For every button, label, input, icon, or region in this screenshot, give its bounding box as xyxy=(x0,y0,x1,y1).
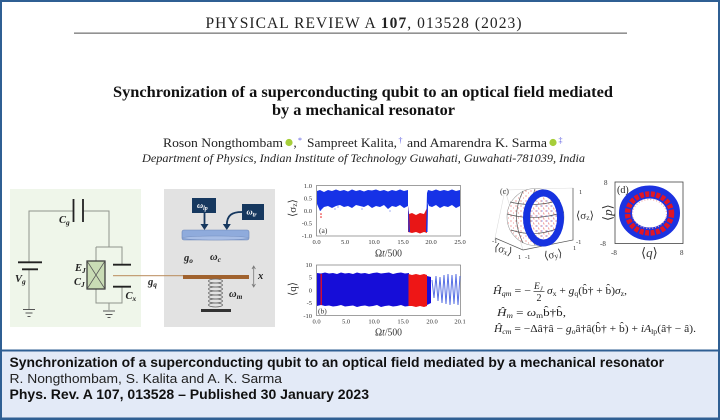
panel: qubit circuit: C xyxy=(59,215,66,226)
equations: Hamiltonians: (b̂† + b̂) xyxy=(578,283,615,297)
coupling line g_q: q xyxy=(153,280,157,289)
panel: qubit circuit: g xyxy=(65,218,70,227)
chart d: phase portrait: 8 xyxy=(604,179,608,187)
chart c: Bloch sphere: -1 xyxy=(525,254,530,261)
panel: qubit circuit: x xyxy=(132,294,137,303)
chart b: q vs time: -10 xyxy=(303,313,312,320)
chart a: sigma z vs time: 15.0 xyxy=(397,239,409,246)
equations: Hamiltonians: 2 xyxy=(536,293,542,304)
chart b: q vs time: -5 xyxy=(307,300,312,307)
equations: Hamiltonians: Ĥ xyxy=(496,307,508,319)
chart b: q vs time: 15.0 xyxy=(397,318,409,326)
chart c: Bloch sphere: ⟨σ xyxy=(576,210,586,222)
affiliation: Department of Physics, Indian Institute of Technology Guwahati, Guwahati-781039, India xyxy=(141,151,585,165)
header: journal citation: PHYSICAL REVIEW A 107, 013528 (2023) xyxy=(206,15,522,32)
authors: ‡ xyxy=(558,136,562,145)
probe laser box: tr xyxy=(253,212,257,218)
equations: Hamiltonians: Ĥ xyxy=(493,323,503,335)
equations: Hamiltonians: cm xyxy=(502,327,512,336)
footer: authors: R. Nongthombam, S. Kalita and A. K. Sarma xyxy=(10,371,283,386)
probe laser box xyxy=(223,204,264,230)
chart a: sigma z vs time: Ωt/500 xyxy=(375,248,402,260)
chart c: Bloch sphere: -1 xyxy=(492,238,497,245)
panel: qubit circuit: J xyxy=(80,280,85,289)
panel: optomechanical resonator xyxy=(164,189,275,327)
panel: qubit circuit: C xyxy=(74,277,81,288)
coupling line g_q: g xyxy=(148,277,153,288)
chart a: sigma z vs time: 5.0 xyxy=(341,239,349,246)
equations: Hamiltonians: b̂†b̂, xyxy=(543,305,566,319)
authors: Sampreet Kalita, xyxy=(307,136,397,150)
chart a: sigma z vs time: -1.0 xyxy=(302,233,312,240)
equations: Hamiltonians: = − xyxy=(512,285,531,297)
panel: qubit circuit: V xyxy=(15,274,22,285)
paper title xyxy=(113,84,613,119)
equations: Hamiltonians: J xyxy=(540,286,544,292)
chart c: Bloch sphere: -1 xyxy=(576,239,581,246)
displacement arrow xyxy=(252,266,255,287)
spring xyxy=(208,279,222,307)
authors xyxy=(163,136,562,150)
authors: † xyxy=(398,136,402,145)
pump laser box xyxy=(192,198,216,230)
chart a: sigma z vs time xyxy=(287,183,466,260)
chart b: q vs time: 5 xyxy=(309,274,312,282)
equations: Hamiltonians: + xyxy=(557,285,569,297)
panel: qubit circuit: g xyxy=(21,277,26,286)
chart d: phase portrait: -8 xyxy=(611,249,617,257)
chart b: q vs time: 10 xyxy=(306,262,312,269)
chart b: q vs time: ⟨q⟩ xyxy=(287,282,299,296)
chart c: Bloch sphere xyxy=(492,187,594,262)
footer: paper title: Synchronization of a superconducting qubit to an optical field mediated by a mechanical resonator xyxy=(10,355,665,370)
equations: Hamiltonians: , xyxy=(624,285,627,297)
chart d: phase portrait: ⟨q⟩ xyxy=(641,245,658,260)
equations: Hamiltonians xyxy=(492,282,696,336)
pump laser box: ω xyxy=(197,200,203,210)
chart d: phase portrait: 8 xyxy=(680,249,684,257)
chart c: Bloch sphere: ⟨σ xyxy=(493,242,506,256)
authors: * xyxy=(298,136,302,145)
panel: qubit circuit xyxy=(10,189,141,327)
equations: Hamiltonians: σ xyxy=(615,285,621,297)
equations: Hamiltonians: lp xyxy=(651,327,657,336)
chart d: phase portrait: -8 xyxy=(600,240,606,248)
chart c: Bloch sphere: ⟩ xyxy=(590,210,594,222)
equations: Hamiltonians: o xyxy=(572,327,576,336)
panel: qubit circuit: E xyxy=(75,263,82,274)
equations: Hamiltonians: iA xyxy=(641,323,651,335)
panel: optomechanical resonator: o xyxy=(189,256,193,265)
panel: optomechanical resonator: c xyxy=(218,255,222,264)
panel: optomechanical resonator: ω xyxy=(229,289,237,300)
chart d: phase portrait xyxy=(600,179,684,260)
authors: and Amarendra K. Sarma xyxy=(407,136,547,150)
equations: Hamiltonians: σ xyxy=(547,285,553,297)
chart b: q vs time: 20.0 xyxy=(426,318,438,326)
equations: Hamiltonians: qm xyxy=(502,289,512,298)
chart c: Bloch sphere: ⟩ xyxy=(557,247,563,260)
chart a: sigma z vs time: ⟩ xyxy=(287,199,299,203)
chart a: sigma z vs time: 20.0 xyxy=(425,239,437,246)
equations: Hamiltonians: m xyxy=(506,311,514,320)
coupling line g_q xyxy=(113,275,183,289)
chart c: Bloch sphere: ⟩ xyxy=(506,246,514,259)
optical cavity mirror xyxy=(182,230,249,240)
chart a: sigma z vs time: 0.0 xyxy=(312,239,321,246)
equations: Hamiltonians: x xyxy=(553,289,557,298)
chart a: sigma z vs time: (a) xyxy=(319,226,328,235)
footer: publication details: Phys. Rev. A 107, 013528 – Published 30 January 2023 xyxy=(10,387,370,402)
equations: Hamiltonians: q xyxy=(574,289,579,298)
panel: optomechanical resonator: g xyxy=(184,253,189,264)
chart a: sigma z vs time: z xyxy=(290,203,299,207)
chart a: sigma z vs time: 1.0 xyxy=(304,183,312,190)
chart a: sigma z vs time: 0.5 xyxy=(304,196,312,202)
authors: Roson Nongthombam xyxy=(163,136,283,150)
mechanical beam xyxy=(183,275,249,279)
paper title: by a mechanical resonator xyxy=(272,102,455,119)
chart c: Bloch sphere: (c) xyxy=(500,187,509,196)
authors: , xyxy=(294,136,297,150)
equations: Hamiltonians: g xyxy=(566,323,572,335)
equations: Hamiltonians: = xyxy=(513,307,527,319)
equations: Hamiltonians: Ĥ xyxy=(492,285,503,297)
chart c: Bloch sphere: x xyxy=(502,248,509,257)
chart b: q vs time: 0 xyxy=(309,288,312,294)
panel: optomechanical resonator: m xyxy=(237,292,243,301)
footer panel: citation box xyxy=(1,350,719,418)
chart b: q vs time: 10.0 xyxy=(368,318,380,326)
chart b: q vs time: 20.1 xyxy=(454,318,466,326)
pump laser box: lp xyxy=(203,206,208,212)
chart b: q vs time xyxy=(287,262,466,338)
chart c: Bloch sphere: 1 xyxy=(518,254,521,261)
chart a: sigma z vs time: 10.0 xyxy=(368,239,380,246)
chart b: q vs time: 0.0 xyxy=(312,318,321,326)
equations: Hamiltonians: = −Δâ†â − xyxy=(511,323,566,335)
equations: Hamiltonians: ω xyxy=(527,307,536,319)
chart c: Bloch sphere: ⟨σ xyxy=(543,249,555,262)
chart c: Bloch sphere: z xyxy=(586,213,590,222)
chart b: q vs time: (b) xyxy=(318,306,327,316)
equations: Hamiltonians: m xyxy=(536,311,543,320)
chart b: q vs time: 5.0 xyxy=(342,318,350,326)
panel: optomechanical resonator: x xyxy=(257,271,263,282)
panel: qubit circuit: C xyxy=(126,291,133,302)
chart c: Bloch sphere: 1 xyxy=(573,245,576,252)
chart a: sigma z vs time: 25.0 xyxy=(454,239,466,246)
chart c: Bloch sphere: y xyxy=(554,251,559,261)
chart d: phase portrait: (d) xyxy=(617,185,629,196)
equations: Hamiltonians: E xyxy=(534,282,540,292)
panel: optomechanical resonator: ω xyxy=(210,252,218,263)
chart a: sigma z vs time: ⟨σ xyxy=(287,207,299,217)
chart b: q vs time: Ωt/500 xyxy=(375,326,402,338)
chart d: phase portrait: ⟨p⟩ xyxy=(600,204,615,221)
probe laser box: ω xyxy=(246,206,253,216)
equations: Hamiltonians: g xyxy=(569,285,575,297)
equations: Hamiltonians: (â† − â). xyxy=(657,323,696,335)
paper title: Synchronization of a superconducting qubit to an optical field mediated xyxy=(113,84,613,101)
chart a: sigma z vs time: 0.0 xyxy=(304,208,312,215)
chart a: sigma z vs time: -0.5 xyxy=(302,220,312,228)
equations: Hamiltonians: â†â(b̂† + b̂) + xyxy=(576,321,641,335)
chart c: Bloch sphere: 1 xyxy=(579,189,582,196)
panel: qubit circuit: J xyxy=(81,266,86,275)
equations: Hamiltonians: z xyxy=(621,289,625,298)
